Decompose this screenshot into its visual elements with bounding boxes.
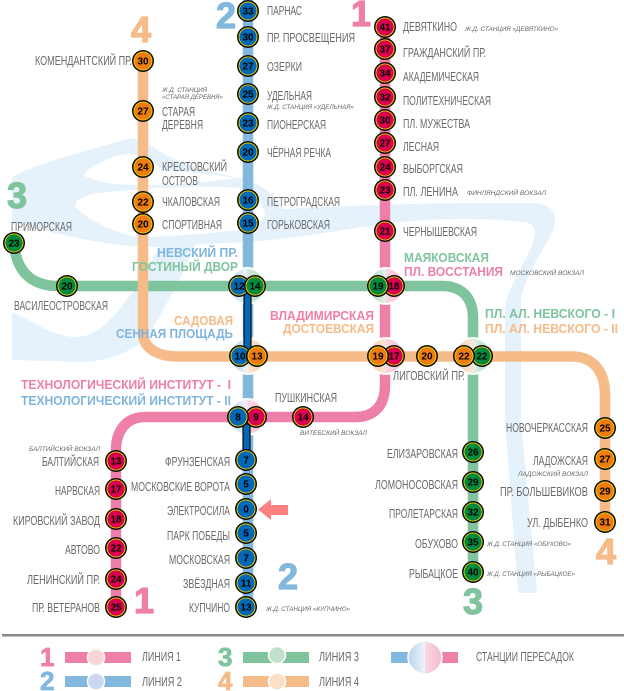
note: Moscow station: МОСКОВСКИЙ ВОКЗАЛ bbox=[510, 268, 585, 277]
line 2 stations south: ПАРК ПОБЕДЫ bbox=[167, 529, 230, 543]
line 3 stations west: 23 bbox=[8, 238, 20, 250]
line 2 stations north bbox=[237, 0, 355, 234]
interchange halo: Nevsky / Gostiny Dvor bbox=[229, 268, 265, 304]
line 2 stations north: ГОРЬКОВСКАЯ bbox=[267, 218, 330, 232]
legend: line 1: ЛИНИЯ 1 bbox=[142, 650, 181, 664]
line 2 stations south: 5 bbox=[243, 480, 249, 490]
interchange stations: Technological Institute bbox=[227, 406, 267, 428]
line 3 stations south: 35 bbox=[467, 538, 479, 548]
interchange halo: Technological Institute bbox=[229, 399, 265, 435]
line 2 stations north: 30 bbox=[242, 32, 254, 44]
interchange halo: Al. Nevsky bbox=[455, 338, 491, 374]
line 1 stations south-west: 22 bbox=[110, 544, 122, 554]
line 2 stations south: 13 bbox=[240, 602, 252, 614]
transfer label: Al. Nevsky II: ПЛ. АЛ. НЕВСКОГО - II bbox=[485, 322, 618, 336]
line 3 stations south: ЛОМОНОСОВСКАЯ bbox=[375, 478, 458, 492]
line 1 stations north: 24 bbox=[379, 162, 391, 174]
interchange stations: Sennaya / Sadovaya: 10 bbox=[234, 352, 246, 362]
interchange stations: Vladimirskaya / Dostoevskaya bbox=[367, 345, 405, 367]
line 2 stations north: 25 bbox=[242, 90, 254, 100]
line 1 stations north: ВЫБОРГСКАЯ bbox=[403, 162, 463, 176]
interchange halo: Sadovaya / Sennaya bbox=[230, 338, 266, 374]
line 2 stations north: ПИОНЕРСКАЯ bbox=[267, 118, 326, 132]
line 4 stations east: 25 bbox=[599, 424, 611, 434]
line 2 stations south bbox=[131, 449, 350, 618]
line 4 stations north: 20 bbox=[137, 220, 149, 230]
line 1 stations north: 32 bbox=[379, 92, 391, 104]
line 4 stations north: 22 bbox=[137, 198, 149, 208]
interchange stations: Al. Nevsky: 22 bbox=[476, 352, 488, 362]
line 2 stations north: 15 bbox=[242, 218, 254, 230]
interchange stations: Al. Nevsky bbox=[453, 345, 493, 367]
line 2 track bbox=[243, 0, 253, 607]
line 2 stations north: ПР. ПРОСВЕЩЕНИЯ bbox=[267, 31, 355, 45]
line 4 stations east: ПР. БОЛЬШЕВИКОВ bbox=[500, 485, 588, 499]
legend: line 3: ЛИНИЯ 3 bbox=[319, 650, 359, 664]
line 1 stations north: 37 bbox=[379, 44, 391, 56]
line 2 stations north: УДЕЛЬНАЯ bbox=[267, 89, 312, 103]
line 3 stations west bbox=[3, 220, 108, 313]
transfer label: Gostiny Dvor: ГОСТИНЫЙ ДВОР bbox=[132, 259, 238, 274]
line 2 stations south: МОСКОВСКИЕ ВОРОТА bbox=[131, 480, 230, 494]
line 1 stations south-west bbox=[13, 391, 368, 618]
interchange stations: Technological Institute: 9 bbox=[253, 412, 259, 424]
line 2 stations south: 5 bbox=[243, 528, 249, 540]
line 2 stations north: 23 bbox=[242, 118, 254, 130]
line 1 stations south-west: 25 bbox=[110, 602, 122, 614]
line 4 stations east: 27 bbox=[599, 454, 611, 466]
line 2 stations north: 16 bbox=[242, 196, 254, 206]
line 3 stations south: 40 bbox=[467, 568, 479, 578]
line 2 stations north: Ж.Д. СТАНЦИЯ «УДЕЛЬНАЯ» bbox=[266, 104, 354, 111]
line 4 stations east: ЛИГОВСКИЙ ПР. bbox=[393, 368, 465, 383]
line 4 stations north: СПОРТИВНАЯ bbox=[162, 218, 222, 232]
legend: line 3 bbox=[218, 642, 359, 672]
legend: line 2 bbox=[40, 666, 182, 691]
footer divider bbox=[2, 634, 624, 636]
interchange stations: Mayakovskaya / Vosstaniya bbox=[367, 275, 405, 297]
line 1 stations north: ПОЛИТЕХНИЧЕСКАЯ bbox=[403, 94, 491, 108]
line 4 numeral top: 4 bbox=[131, 9, 151, 50]
interchange halo: Mayakovskaya / Vosstaniya bbox=[368, 268, 404, 304]
transfer label: Mayakovskaya: МАЯКОВСКАЯ bbox=[404, 251, 489, 265]
line 2 stations south: Ж.Д. СТАНЦИЯ «КУПЧИНО» bbox=[265, 606, 350, 613]
line 1 stations north: Ж.Д. СТАНЦИЯ «ДЕВЯТКИНО» bbox=[464, 26, 558, 33]
line 3 stations south: Ж.Д. СТАНЦИЯ «РЫБАЦКОЕ» bbox=[486, 571, 575, 578]
line 1 stations north: АКАДЕМИЧЕСКАЯ bbox=[403, 70, 479, 84]
line 1 stations south-west: 13 bbox=[110, 456, 122, 468]
line 1 stations north: 34 bbox=[379, 68, 391, 80]
line 1 stations north: ФИНЛЯНДСКИЙ ВОКЗАЛ bbox=[467, 188, 547, 197]
legend: line 3: 3 bbox=[218, 642, 232, 672]
line 4 stations north: «СТАРАЯ ДЕРЕВНЯ» bbox=[162, 94, 223, 101]
line 4 stations north: 24 bbox=[137, 162, 149, 174]
line 1 stations south-west: БАЛТИЙСКАЯ bbox=[42, 454, 99, 469]
line 1 stations north: ГРАЖДАНСКИЙ ПР. bbox=[403, 45, 486, 60]
transfer label: Technological Institute II: ТЕХНОЛОГИЧЕСКИЙ ИНСТИТУТ - II bbox=[21, 393, 231, 408]
line 3 stations south: 26 bbox=[467, 448, 479, 458]
legend: transfer stations bbox=[391, 641, 574, 674]
line 1 track bbox=[116, 27, 385, 607]
line 3 numeral bottom: 3 bbox=[463, 581, 483, 622]
interchange stations: Sennaya / Sadovaya bbox=[229, 345, 268, 367]
line 2 stations north: ОЗЕРКИ bbox=[267, 60, 302, 74]
interchange stations: Mayakovskaya / Vosstaniya: 19 bbox=[372, 282, 384, 292]
line 1 stations south-west: КИРОВСКИЙ ЗАВОД bbox=[13, 513, 100, 528]
line 4 stations north bbox=[35, 50, 227, 235]
transfer label: Sennaya Ploshchad: СЕННАЯ ПЛОЩАДЬ bbox=[116, 327, 233, 341]
line 4 stations north: ЧКАЛОВСКАЯ bbox=[162, 195, 220, 209]
line 2 numeral bottom: 2 bbox=[278, 556, 298, 597]
line 2 stations south: ЭЛЕКТРОСИЛА bbox=[167, 504, 230, 518]
line 3 stations west: ВАСИЛЕОСТРОВСКАЯ bbox=[14, 299, 108, 313]
line 2 stations south: 7 bbox=[243, 554, 249, 564]
line 2 stations south: КУПЧИНО bbox=[189, 601, 230, 615]
line 4 stations north: ОСТРОВ bbox=[162, 174, 198, 188]
line 4 stations east bbox=[393, 345, 616, 533]
highlighted route: Technological Institute to Frunzenskaya bbox=[243, 424, 250, 454]
line 3 stations south: ЕЛИЗАРОВСКАЯ bbox=[387, 447, 458, 461]
line 1 stations north: ДЕВЯТКИНО bbox=[403, 20, 457, 34]
line 4 stations east: 31 bbox=[599, 518, 611, 528]
line 2 stations south: 7 bbox=[243, 456, 249, 466]
line 3 track bbox=[14, 243, 473, 572]
interchange stations: Nevsky / Gostiny Dvor bbox=[228, 275, 266, 297]
line 1 numeral bottom: 1 bbox=[134, 580, 154, 621]
line 3 stations south: ОБУХОВО bbox=[415, 537, 458, 551]
line 4 stations east: ЛАДОЖСКАЯ bbox=[533, 454, 588, 468]
interchange stations: Vladimirskaya / Dostoevskaya: 17 bbox=[388, 352, 400, 362]
line 1 stations north: 30 bbox=[379, 116, 391, 126]
legend: line 4 bbox=[218, 666, 359, 691]
legend: line 2: ЛИНИЯ 2 bbox=[142, 675, 182, 689]
line 3 stations west: 20 bbox=[61, 282, 73, 292]
line 4 stations east: 20 bbox=[421, 352, 433, 362]
transfer label: Vladimirskaya: ВЛАДИМИРСКАЯ bbox=[270, 309, 374, 323]
line 1 stations north: ПЛ. МУЖЕСТВА bbox=[403, 117, 470, 131]
line 1 stations south-west: 14 bbox=[297, 412, 309, 424]
line 1 stations south-west: НАРВСКАЯ bbox=[55, 484, 100, 498]
line 2 stations north: ПАРНАС bbox=[267, 4, 302, 18]
line 3 stations south: Ж.Д. СТАНЦИЯ «ОБУХОВО» bbox=[486, 541, 571, 548]
line 3 stations west: ПРИМОРСКАЯ bbox=[11, 220, 72, 234]
transfer label: Nevsky Prospekt: НЕВСКИЙ ПР. bbox=[157, 245, 238, 260]
line 1 stations north: 27 bbox=[379, 138, 391, 150]
line 2 stations north: ПЕТРОГРАДСКАЯ bbox=[267, 195, 340, 209]
line 1 stations north: 41 bbox=[379, 22, 391, 34]
line 1 stations north: ПЛ. ЛЕНИНА bbox=[403, 185, 458, 199]
arrow: you are here bbox=[258, 499, 288, 520]
line 1 stations north: ЛЕСНАЯ bbox=[403, 140, 439, 154]
line 4 stations north: КОМЕНДАНТСКИЙ ПР. bbox=[35, 53, 132, 68]
line 3 stations south: РЫБАЦКОЕ bbox=[409, 567, 458, 581]
transfer label: Technological Institute I: ТЕХНОЛОГИЧЕСКИЙ ИНСТИТУТ - I bbox=[21, 377, 231, 392]
interchange halo: Vladimirskaya / Dostoevskaya bbox=[368, 338, 404, 374]
transfer label: Dostoevskaya: ДОСТОЕВСКАЯ bbox=[283, 322, 374, 336]
line 4 stations east: ЛАДОЖСКИЙ ВОКЗАЛ bbox=[517, 469, 589, 478]
line 2 stations south: ФРУНЗЕНСКАЯ bbox=[165, 455, 230, 469]
line 1 stations north: 23 bbox=[379, 186, 391, 196]
line 1 stations south-west: ВИТЕБСКИЙ ВОКЗАЛ bbox=[300, 428, 368, 437]
line 2 stations north: 27 bbox=[242, 62, 254, 72]
line 4 stations east: 29 bbox=[599, 486, 611, 498]
legend: line 1 bbox=[40, 642, 181, 672]
line 4 stations east: УЛ. ДЫБЕНКО bbox=[527, 516, 588, 530]
line 3 numeral left: 3 bbox=[7, 175, 27, 216]
line 1 stations south-west: ПР. ВЕТЕРАНОВ bbox=[32, 601, 100, 615]
line 1 stations south-west: 18 bbox=[110, 514, 122, 526]
interchange stations: Nevsky / Gostiny Dvor: 12 bbox=[233, 282, 245, 292]
line 4 stations north: СТАРАЯ bbox=[162, 105, 195, 119]
transfer label: Ploshchad Vosstaniya: ПЛ. ВОССТАНИЯ bbox=[404, 265, 503, 279]
interchange stations: Nevsky / Gostiny Dvor: 14 bbox=[249, 282, 261, 292]
line 1 stations south-west: ПУШКИНСКАЯ bbox=[275, 391, 337, 405]
legend: line 4: ЛИНИЯ 4 bbox=[319, 675, 359, 689]
interchange stations: Al. Nevsky: 22 bbox=[458, 352, 470, 362]
legend: transfer stations: СТАНЦИИ ПЕРЕСАДОК bbox=[476, 650, 574, 664]
line 4 stations north: 27 bbox=[137, 106, 149, 118]
highlighted route: Nevsky to Sennaya bbox=[244, 290, 251, 352]
line 4 numeral bottom: 4 bbox=[596, 531, 616, 572]
line 2 stations south: ЗВЁЗДНАЯ bbox=[183, 577, 230, 591]
line 2 stations south: 0 bbox=[243, 504, 249, 516]
line 1 stations north: ЧЕРНЫШЕВСКАЯ bbox=[403, 225, 477, 239]
line 3 stations south: ПРОЛЕТАРСКАЯ bbox=[389, 507, 458, 521]
line 3 stations south: 29 bbox=[467, 478, 479, 488]
line 4 track bbox=[143, 60, 605, 522]
line 4 stations north: Ж.Д. СТАНЦИЯ bbox=[161, 87, 208, 94]
line 1 stations south-west: ЛЕНИНСКИЙ ПР. bbox=[27, 572, 100, 587]
line 1 stations north: 21 bbox=[379, 226, 391, 238]
river background bbox=[12, 138, 555, 593]
transfer label: Al. Nevsky I: ПЛ. АЛ. НЕВСКОГО - I bbox=[485, 307, 615, 321]
line 2 stations north: ЧЁРНАЯ РЕЧКА bbox=[267, 146, 331, 160]
line 1 stations south-west: 24 bbox=[110, 574, 122, 586]
interchange stations: Sennaya / Sadovaya: 13 bbox=[251, 352, 263, 362]
line 3 stations south: 32 bbox=[467, 508, 479, 518]
line 4 stations north: КРЕСТОВСКИЙ bbox=[162, 159, 227, 174]
interchange stations: Mayakovskaya / Vosstaniya: 18 bbox=[388, 282, 400, 292]
line 2 stations south: МОСКОВСКАЯ bbox=[169, 553, 230, 567]
line 2 stations south: 11 bbox=[241, 578, 252, 590]
line 2 stations north: 33 bbox=[242, 6, 254, 18]
line 1 stations south-west: БАЛТИЙСКИЙ ВОКЗАЛ bbox=[29, 444, 101, 453]
interchange stations: Technological Institute: 8 bbox=[235, 412, 241, 424]
legend: line 1: 1 bbox=[40, 642, 54, 672]
line 3 stations south bbox=[375, 441, 575, 583]
line 1 stations north bbox=[374, 16, 558, 242]
line 1 stations south-west: 17 bbox=[110, 484, 122, 496]
line 4 stations east: НОВОЧЕРКАССКАЯ bbox=[506, 421, 588, 435]
line 4 stations north: 30 bbox=[137, 56, 149, 68]
interchange stations: Vladimirskaya / Dostoevskaya: 19 bbox=[372, 352, 384, 362]
line 1 stations south-west: АВТОВО bbox=[65, 543, 100, 557]
line 4 stations north: ДЕРЕВНЯ bbox=[162, 118, 203, 132]
line 2 stations north: 20 bbox=[242, 148, 254, 158]
transfer label: Sadovaya: САДОВАЯ bbox=[174, 314, 233, 328]
